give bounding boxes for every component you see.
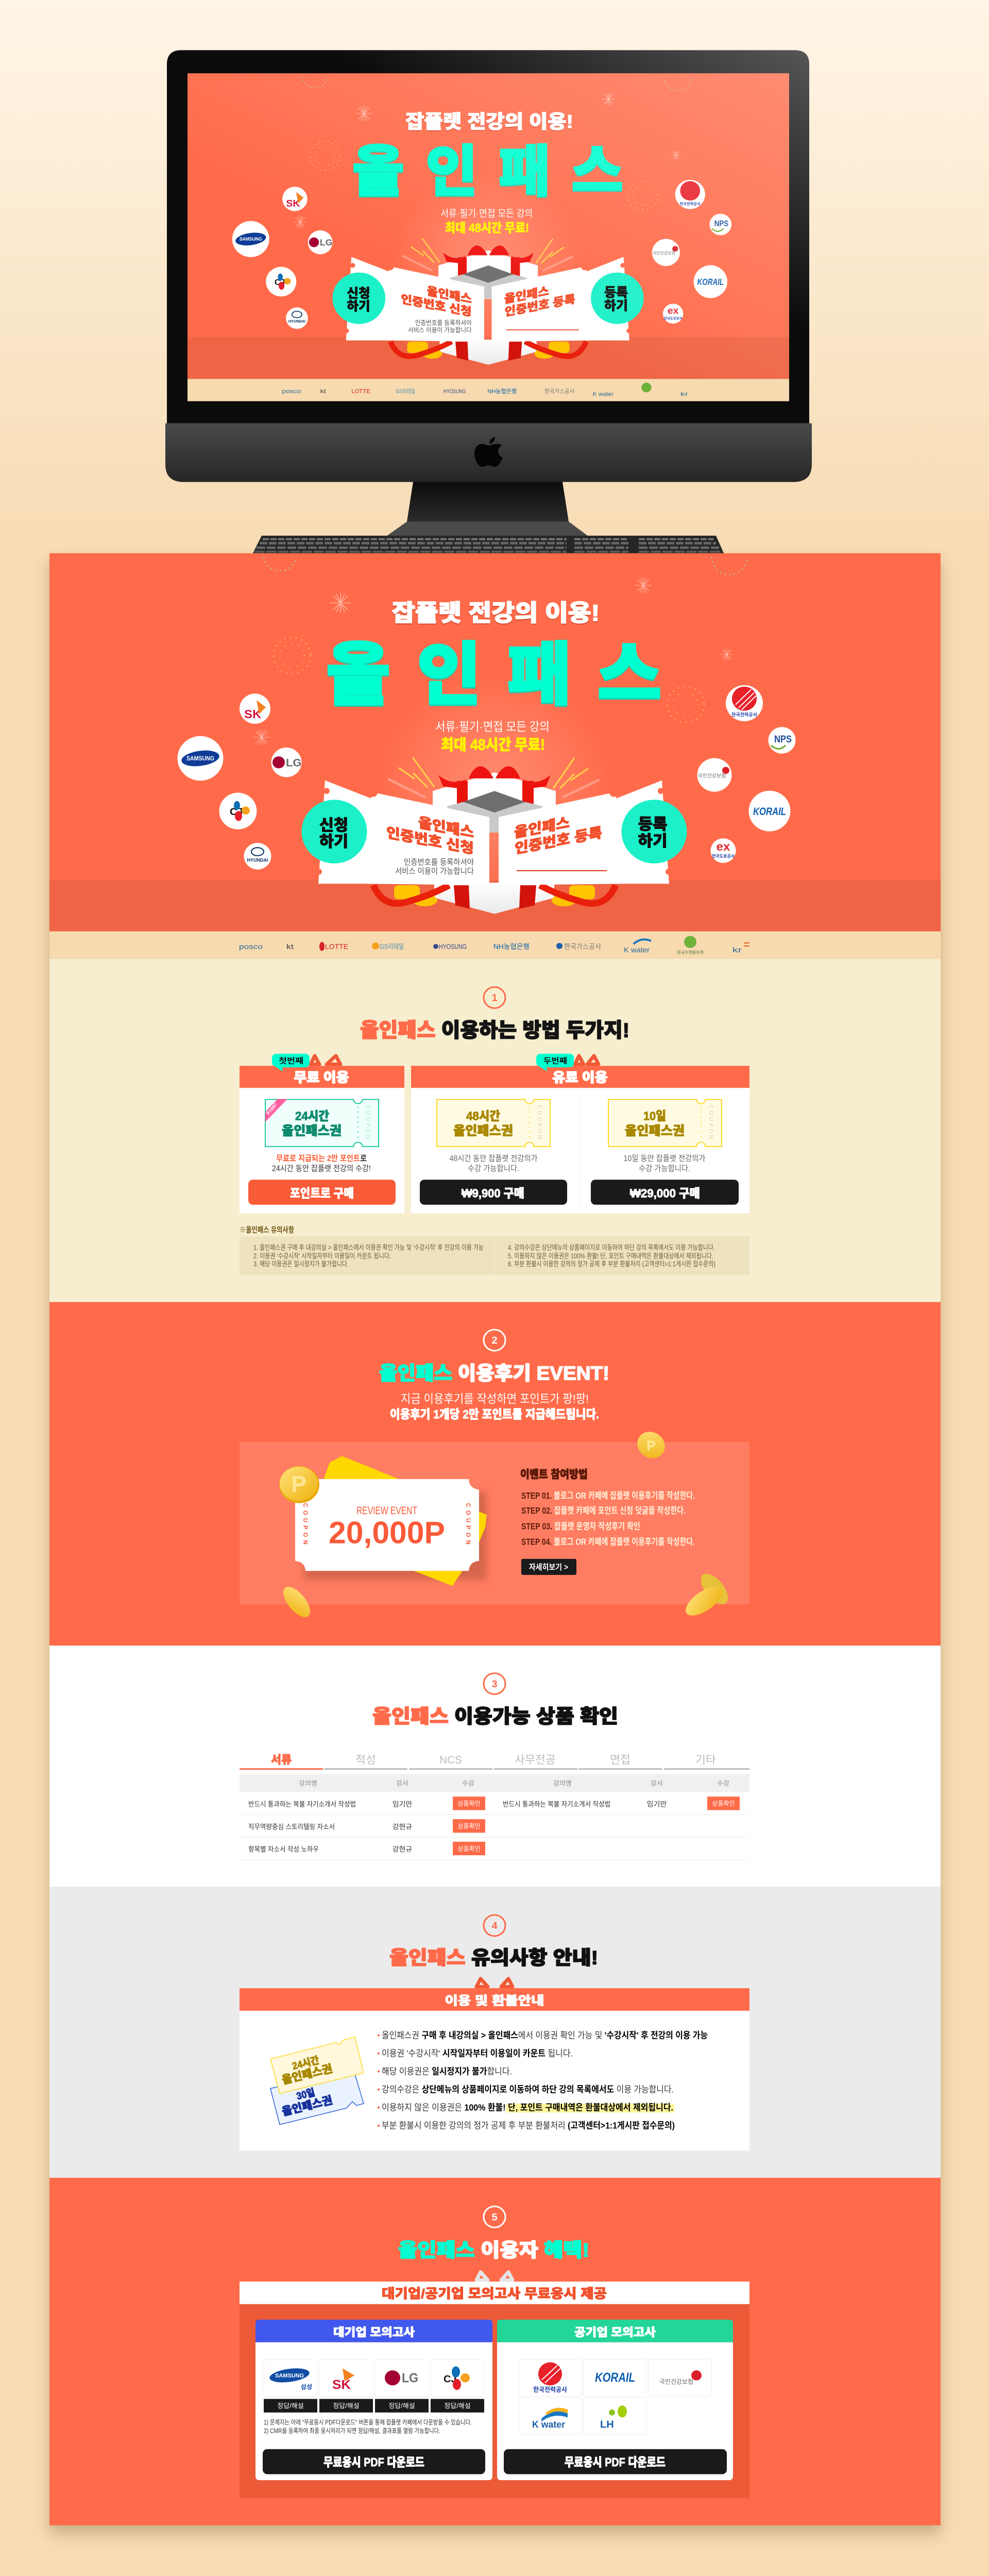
card: paid use: 유료 이용 (552, 1070, 608, 1085)
tag: second: 두번째 (543, 1057, 567, 1065)
subheading: 지금 이용후기를 작성하면 포인트가 팡!팡! (401, 1392, 589, 1406)
logo: health insurance: 국민건강보험 (697, 773, 726, 779)
page drop shadow (49, 562, 941, 2534)
screen: hero preview: 인증번호를 등록하셔야 (415, 319, 472, 327)
product table: 수강 (717, 1780, 729, 1787)
coupon: 48 hours (437, 1099, 550, 1146)
left panel heading: 인증번호 신청 (386, 824, 474, 857)
keyboard (252, 536, 724, 554)
product table: 항목별 자소서 작성 노하우 (248, 1845, 319, 1853)
notes box: 3. 해당 이용권은 일시정지가 불가합니다. (253, 1260, 349, 1268)
logo: sk: SK (244, 708, 261, 721)
left panel note: 인증번호를 등록하셔야 (404, 858, 474, 867)
product table: 강현규 (393, 1823, 412, 1831)
screen: hero preview: 잡플랫 전강의 이용! (405, 111, 573, 132)
fireworks sparks (253, 578, 733, 745)
notes box: 5. 이용하지 않은 이용권은 100% 환불! 단, 포인트 구매내역은 환불대상에서 제외됩니다. (508, 1252, 713, 1260)
coupon: 10 days: COUPON (708, 1105, 714, 1141)
category tabs: 면접 (610, 1753, 630, 1766)
partner logo strip: K water (624, 946, 650, 954)
partner logo strip: kt (286, 942, 294, 951)
subheading bold: 이용후기 1개당 2만 포인트를 지급해드립니다. (390, 1408, 599, 1421)
coin: large: P (291, 1472, 306, 1497)
product table: 상품확인 (712, 1800, 735, 1807)
category tabs (240, 1753, 749, 1769)
coupon: 24 hours: Free! (265, 1101, 279, 1116)
logo: samsung: 삼성 (301, 2383, 312, 2391)
event steps (520, 1468, 695, 1547)
card: large companies: 대기업 모의고사 (333, 2326, 415, 2339)
monitor chin (165, 423, 812, 482)
left ticket panel (302, 781, 489, 885)
screen: hero preview: KORAIL (697, 277, 724, 287)
logo: samsung (177, 736, 224, 781)
button: apply: 신청 (319, 817, 348, 834)
gift box illustration (373, 766, 616, 914)
notice list (378, 2030, 708, 2131)
logo: kepco (726, 685, 763, 721)
event panel (240, 1442, 749, 1604)
screen: hero preview: NH농협은행 (487, 388, 517, 395)
gift rays (388, 757, 599, 798)
notice list: 부분 환불시 이용한 강의의 정가 공제 후 부분 환불처리 (고객센터>1:1게시판 접수문의) (382, 2121, 675, 2131)
logo: health insurance: 국민건강보험 (659, 2378, 693, 2385)
notes box: 1. 올인패스권 구매 후 내강의실 > 올인패스에서 이용권 확인 가능 및 '수강시작' 후 전강의 이용 가능 (253, 1243, 484, 1251)
notice list: 이용하지 않은 이용권은 100% 환불! 단, 포인트 구매내역은 환불대상에서 제외됩니다. (382, 2103, 673, 2113)
logo: lg (385, 2370, 418, 2385)
logo: samsung: SAMSUNG (275, 2373, 304, 2379)
button: register (621, 800, 687, 863)
free description (272, 1154, 371, 1173)
logo: korail (749, 791, 790, 832)
answer labels: 정답/해설 (444, 2402, 471, 2410)
button: apply: 하기 (319, 833, 348, 850)
screen: hero preview: 서비스 이용이 가능합니다 (408, 326, 472, 334)
button: 29000 (591, 1180, 739, 1205)
product table: 임기만 (393, 1800, 413, 1808)
logo: expressway: ex (717, 840, 730, 854)
screen: hero preview: 신청 (347, 286, 370, 300)
panel: section 1 how to use (49, 959, 941, 1302)
coupon: 24 hours: 24시간 (295, 1109, 329, 1123)
coupon: 48 hours: 48시간 (466, 1109, 500, 1123)
logo cells (519, 2359, 711, 2434)
fireworks dotted rings (264, 558, 747, 723)
step badge 4 (484, 1915, 505, 1936)
coupon: 24 hours: COUPON (365, 1105, 371, 1141)
event steps: 이벤트 참여방법 (520, 1468, 588, 1481)
category tabs: NCS (439, 1753, 462, 1766)
logo: nps (769, 727, 795, 754)
logo: hyundai: HYUNDAI (247, 858, 268, 862)
exam notes: 2) CMR을 등록하여 최종 응시처리가 되면 정답/해설, 결과표를 열람 가능합니다. (264, 2427, 440, 2435)
notice list: 올인패스권 구매 후 내강의실 > 올인패스에서 이용권 확인 가능 및 '수강시작' 후 전강의 이용 가능 (382, 2030, 708, 2040)
screen: hero preview: LG (320, 238, 333, 248)
button: register: 등록 (638, 816, 667, 833)
card: free use: 무료 이용 (294, 1070, 349, 1085)
event steps: STEP 04. 블로그 OR 카페에 잡플랫 이용후기를 작성한다. (521, 1537, 695, 1547)
event steps: STEP 02. 잡플랫 카페에 포인트 신청 덧글을 작성한다. (521, 1505, 686, 1516)
step badge 1: 1 (491, 992, 498, 1004)
notice list: 이용권 '수강시작' 시작일자부터 이용일이 카운트 됩니다. (382, 2048, 573, 2058)
logo: lh (600, 2405, 627, 2430)
card: public companies: 공기업 모의고사 (574, 2326, 656, 2339)
exam notes: 1) 문제지는 아래 "무료응시 PDF다운로드" 버튼을 통해 잡플랫 카페에서 다운받을 수 있습니다. (264, 2418, 472, 2426)
step badge 3 (484, 1673, 505, 1694)
free description: 무료로 지급되는 2만 포인트로 (276, 1154, 367, 1163)
logo: nps: NPS (774, 734, 792, 745)
icon: rotated tickets: 올인패스권 (281, 2094, 334, 2118)
product table: 임기만 (647, 1800, 667, 1808)
product table: 반드시 통과하는 복불 자기소개서 작성법 (248, 1800, 356, 1808)
answer labels: 정답/해설 (277, 2402, 304, 2410)
button: 9900 (420, 1180, 567, 1205)
screen: hero preview: K water (593, 392, 613, 398)
logo: sk (332, 2368, 354, 2392)
48 hours description: 48시간 동안 잡플랫 전강의가 (450, 1154, 538, 1163)
logo: lg (271, 748, 302, 777)
step badge 3: 3 (491, 1679, 498, 1690)
hero subtitle: 서류·필기·면접 모든 강의 (435, 720, 550, 734)
panel: section 2 review event (49, 1302, 941, 1646)
icon: rotated tickets: 30일 (295, 2087, 316, 2102)
answer labels: 정답/해설 (333, 2402, 360, 2410)
monitor bezel (167, 50, 809, 423)
product table (240, 1774, 749, 1860)
screen: hero preview: 하기 (347, 299, 370, 313)
screen: hero preview: 올인패스 (427, 284, 472, 306)
notes box (240, 1236, 749, 1275)
left panel heading: 올인패스 (418, 815, 474, 841)
screen: hero preview: GS리테일 (396, 387, 415, 395)
answer labels: 정답/해설 (388, 2402, 415, 2410)
screen: hero preview: 한국전력공사 (680, 201, 701, 206)
product table: 강의명 (299, 1780, 317, 1787)
coupon: 24 hours (265, 1099, 379, 1146)
white coupon: 20,000P (329, 1515, 445, 1550)
coupon shadow (304, 1492, 487, 1580)
product table: 반드시 통과하는 복불 자기소개서 작성법 (503, 1800, 610, 1808)
partner logo strip: NH농협은행 (493, 942, 530, 951)
icon: rotated tickets: 24시간 (291, 2055, 320, 2072)
screen: hero preview: SAMSUNG (240, 236, 262, 242)
right panel heading: 인증번호 등록 (515, 824, 602, 857)
category tabs: 사무전공 (515, 1753, 556, 1766)
subheading bar (240, 2282, 749, 2304)
10 days description: 수강 가능합니다. (639, 1164, 690, 1173)
logo: kepco (533, 2362, 567, 2394)
screen: hero preview: HYOSUNG (444, 388, 466, 395)
panel: section 4 notice (49, 1887, 941, 2178)
notes box: 2. 이용권 '수강시작' 시작일자부터 이용일이 카운트 됩니다. (253, 1252, 391, 1260)
button: details: 자세히보기 > (529, 1563, 568, 1572)
screen: hero preview: 국민건강보험 (653, 250, 675, 256)
10 days description (623, 1154, 706, 1173)
white coupon (295, 1479, 479, 1571)
screen: hero preview (187, 73, 789, 401)
logo: lg: LG (286, 756, 302, 769)
event steps: STEP 03. 잡플랫 운영자 작성후기 확인 (521, 1521, 640, 1531)
heading: 올인패스 이용하는 방법 두가지! (360, 1020, 629, 1042)
monitor mockup (129, 50, 849, 554)
panel: section 3 available products (49, 1646, 941, 1887)
notice list: 해당 이용권은 일시정지가 불가합니다. (382, 2066, 512, 2076)
step badge 4: 4 (491, 1920, 498, 1931)
logo: health insurance (659, 2370, 702, 2385)
logo: expressway: 한국도로공사 (712, 854, 735, 859)
coin: bottom left (278, 1583, 315, 1621)
white coupon: REVIEW EVENT (356, 1504, 417, 1517)
screen: hero preview: ex (668, 306, 679, 316)
left panel note (395, 858, 474, 876)
partner logo strip: 한국수력원자력 (677, 951, 704, 955)
notice card: 이용 및 환불안내 (445, 1994, 544, 2008)
notice list: 강의수강은 상단메뉴의 상품페이지로 이동하여 하단 강의 목록에서도 이용 가능합니다. (382, 2084, 674, 2094)
coin: bottom right back (696, 1569, 733, 1609)
heading: 올인패스 이용후기 EVENT! (379, 1363, 609, 1384)
screen: hero preview: 올인패스 (352, 141, 623, 202)
logo: sk: SK (332, 2378, 351, 2392)
product table: 상품확인 (457, 1845, 481, 1852)
exam notes (264, 2418, 472, 2435)
48 hours description (450, 1154, 538, 1173)
gift glow (376, 672, 613, 903)
coin: top right: P (646, 1439, 656, 1453)
screen: hero preview: 올인패스 (504, 284, 549, 306)
bow (311, 1056, 340, 1064)
step badge 2: 2 (491, 1335, 498, 1346)
product table: 강의명 (553, 1780, 572, 1787)
logo cells (264, 2360, 484, 2396)
bow (476, 2272, 513, 2280)
logo: expressway (711, 838, 736, 863)
coin: bottom right front (681, 1581, 727, 1621)
answer labels (264, 2399, 484, 2413)
logo: lg: LG (402, 2371, 418, 2385)
logo: hyundai (244, 843, 271, 870)
button: pdf download: 무료응시 PDF 다운로드 (323, 2455, 424, 2469)
button: buy with points (248, 1180, 396, 1205)
partner logo strip: HYOSUNG (439, 942, 467, 951)
screen: hero preview: kt (320, 388, 327, 395)
logo: kepco: 한국전력공사 (731, 711, 757, 717)
product table: 상품확인 (457, 1800, 481, 1807)
screen: hero preview: 한국가스공사 (544, 388, 574, 395)
icon: rotated tickets (270, 2037, 364, 2125)
card: public companies (497, 2320, 733, 2480)
tag: first (272, 1054, 310, 1071)
product table: 수강 (462, 1780, 474, 1787)
screen: hero preview: 등록 (604, 286, 628, 300)
coupon: 24 hours: 올인패스권 (282, 1124, 342, 1138)
screen: hero preview: SK (286, 198, 300, 209)
tag: first: 첫번째 (279, 1057, 303, 1065)
button: pdf download (263, 2449, 485, 2474)
icon: apple logo (474, 437, 503, 467)
logo: health insurance (697, 758, 731, 792)
coupon: 48 hours: 올인패스권 (453, 1124, 513, 1138)
partner logo strip: kr (732, 946, 742, 954)
card: free use (240, 1054, 404, 1213)
hero title: 올인패스 (326, 637, 662, 713)
logo: samsung (269, 2366, 312, 2391)
hero highlight: 최대 48시간 무료! (441, 737, 545, 753)
white coupon: COUPON (302, 1503, 309, 1548)
partner logo strip: GS리테일 (380, 942, 404, 951)
screen: hero preview: LOTTE (351, 388, 370, 395)
heading: 올인패스 이용자 혜택! (398, 2239, 589, 2261)
step badge 5: 5 (491, 2212, 498, 2223)
button: pdf download: 무료응시 PDF 다운로드 (565, 2455, 666, 2469)
heading: 올인패스 이용가능 상품 확인 (372, 1706, 618, 1727)
coupon: 10 days (608, 1099, 722, 1146)
logo: cj (219, 793, 257, 829)
screen: hero preview: 한국도로공사 (664, 316, 683, 320)
coin: large (279, 1466, 319, 1503)
step badge 2 (484, 1330, 505, 1351)
button: 29000: ₩29,000 구매 (630, 1187, 700, 1200)
button: buy with points: 포인트로 구매 (290, 1187, 354, 1200)
left panel note: 서비스 이용이 가능합니다 (395, 867, 474, 876)
screen: hero preview: 인증번호 신청 (401, 293, 472, 318)
event steps: STEP 01. 블로그 OR 카페에 잡플랫 이용후기를 작성한다. (521, 1490, 695, 1501)
logo: cj (444, 2366, 470, 2390)
screen: hero preview: 인증번호 등록 (505, 293, 575, 318)
screen: hero preview: 하기 (604, 299, 628, 313)
notes box: 4. 강의수강은 상단메뉴의 상품페이지로 이동하여 하단 강의 목록에서도 이용 가능합니다. (508, 1243, 715, 1251)
screen: hero preview: posco (282, 388, 301, 395)
partner logo strip: posco (239, 942, 263, 951)
button: details (521, 1559, 576, 1575)
10 days description: 10일 동안 잡플랫 전강의가 (623, 1154, 705, 1163)
partner logo strip: LOTTE (325, 942, 348, 951)
right panel heading: 올인패스 (514, 815, 570, 841)
notes box: 6. 부분 환불시 이용한 강의의 정가 공제 후 부분 환불처리 (고객센터>1:1게시판 접수문의) (508, 1260, 715, 1268)
icon: rotated tickets: 올인패스권 (281, 2062, 334, 2087)
logo: korail: KORAIL (595, 2371, 635, 2385)
dark panel (240, 2304, 749, 2498)
logo: cj: CJ (230, 806, 243, 818)
coin: top right (632, 1427, 671, 1464)
step badge 5 (484, 2207, 505, 2227)
logo: lh: LH (600, 2419, 614, 2430)
bow (575, 1056, 599, 1064)
logo: sk (240, 693, 270, 724)
partner logo strip (49, 931, 941, 959)
category tabs: 기타 (695, 1753, 716, 1766)
screen: hero preview: CJ (275, 278, 285, 287)
card: paid use (411, 1054, 749, 1213)
product table: 상품확인 (457, 1823, 481, 1829)
notice card (240, 1988, 749, 2150)
step badge 1 (484, 987, 505, 1008)
monitor stand (384, 482, 590, 538)
logo: korail: KORAIL (753, 805, 786, 818)
panel: hero (49, 553, 941, 931)
notes title: ※올인패스 유의사항 (240, 1226, 294, 1234)
48 hours description: 수강 가능합니다. (468, 1164, 519, 1173)
product table: 강사 (651, 1780, 663, 1787)
button: pdf download (504, 2449, 727, 2474)
heading: 올인패스 유의사항 안내! (389, 1947, 598, 1968)
page background (0, 0, 989, 557)
card: large companies (255, 2320, 492, 2480)
product table: 강현규 (393, 1845, 412, 1853)
hero floor band (49, 880, 941, 931)
bow (476, 1979, 513, 1987)
yellow coupon behind (322, 1456, 487, 1586)
logo: k-water: K water (532, 2419, 566, 2430)
button: 9900: ₩9,900 구매 (462, 1187, 524, 1200)
logo: kepco: 한국전력공사 (533, 2386, 567, 2394)
screen: hero preview: 서류·필기·면접 모든 강의 (440, 208, 533, 219)
logo: cj: CJ (444, 2374, 457, 2385)
coupon: 10 days: 10일 (643, 1109, 666, 1123)
partner logo strip: 한국가스공사 (564, 942, 601, 951)
category tabs: 서류 (271, 1753, 292, 1766)
category tabs: 적성 (355, 1753, 376, 1766)
screen: hero preview: HYUNDAI (288, 319, 305, 324)
screen: hero preview: kr (680, 392, 688, 398)
product table: 직무역량중심 스토리텔링 자소서 (248, 1823, 335, 1831)
panel: section 5 benefits (49, 2178, 941, 2526)
screen: hero preview: NPS (714, 219, 728, 228)
button: apply (302, 800, 367, 863)
product table: 강사 (396, 1780, 408, 1787)
logo: k-water (532, 2408, 568, 2430)
coupon: 48 hours: COUPON (536, 1105, 542, 1141)
hero kicker: 잡플랫 전강의 이용! (392, 600, 600, 626)
subheading bar: 대기업/공기업 모의고사 무료응시 제공 (382, 2286, 607, 2301)
right ticket panel (499, 781, 687, 885)
screen sheen overlay (187, 73, 789, 380)
tag: second (536, 1054, 574, 1071)
button: register: 하기 (638, 833, 667, 850)
coupon: 10 days: 올인패스권 (625, 1124, 685, 1138)
free description: 24시간 동안 잡플랫 전강의 수강! (272, 1164, 371, 1173)
logo: samsung: SAMSUNG (186, 755, 214, 762)
screen: hero preview: 최대 48시간 무료! (445, 222, 529, 235)
white coupon: COUPON (465, 1503, 472, 1548)
